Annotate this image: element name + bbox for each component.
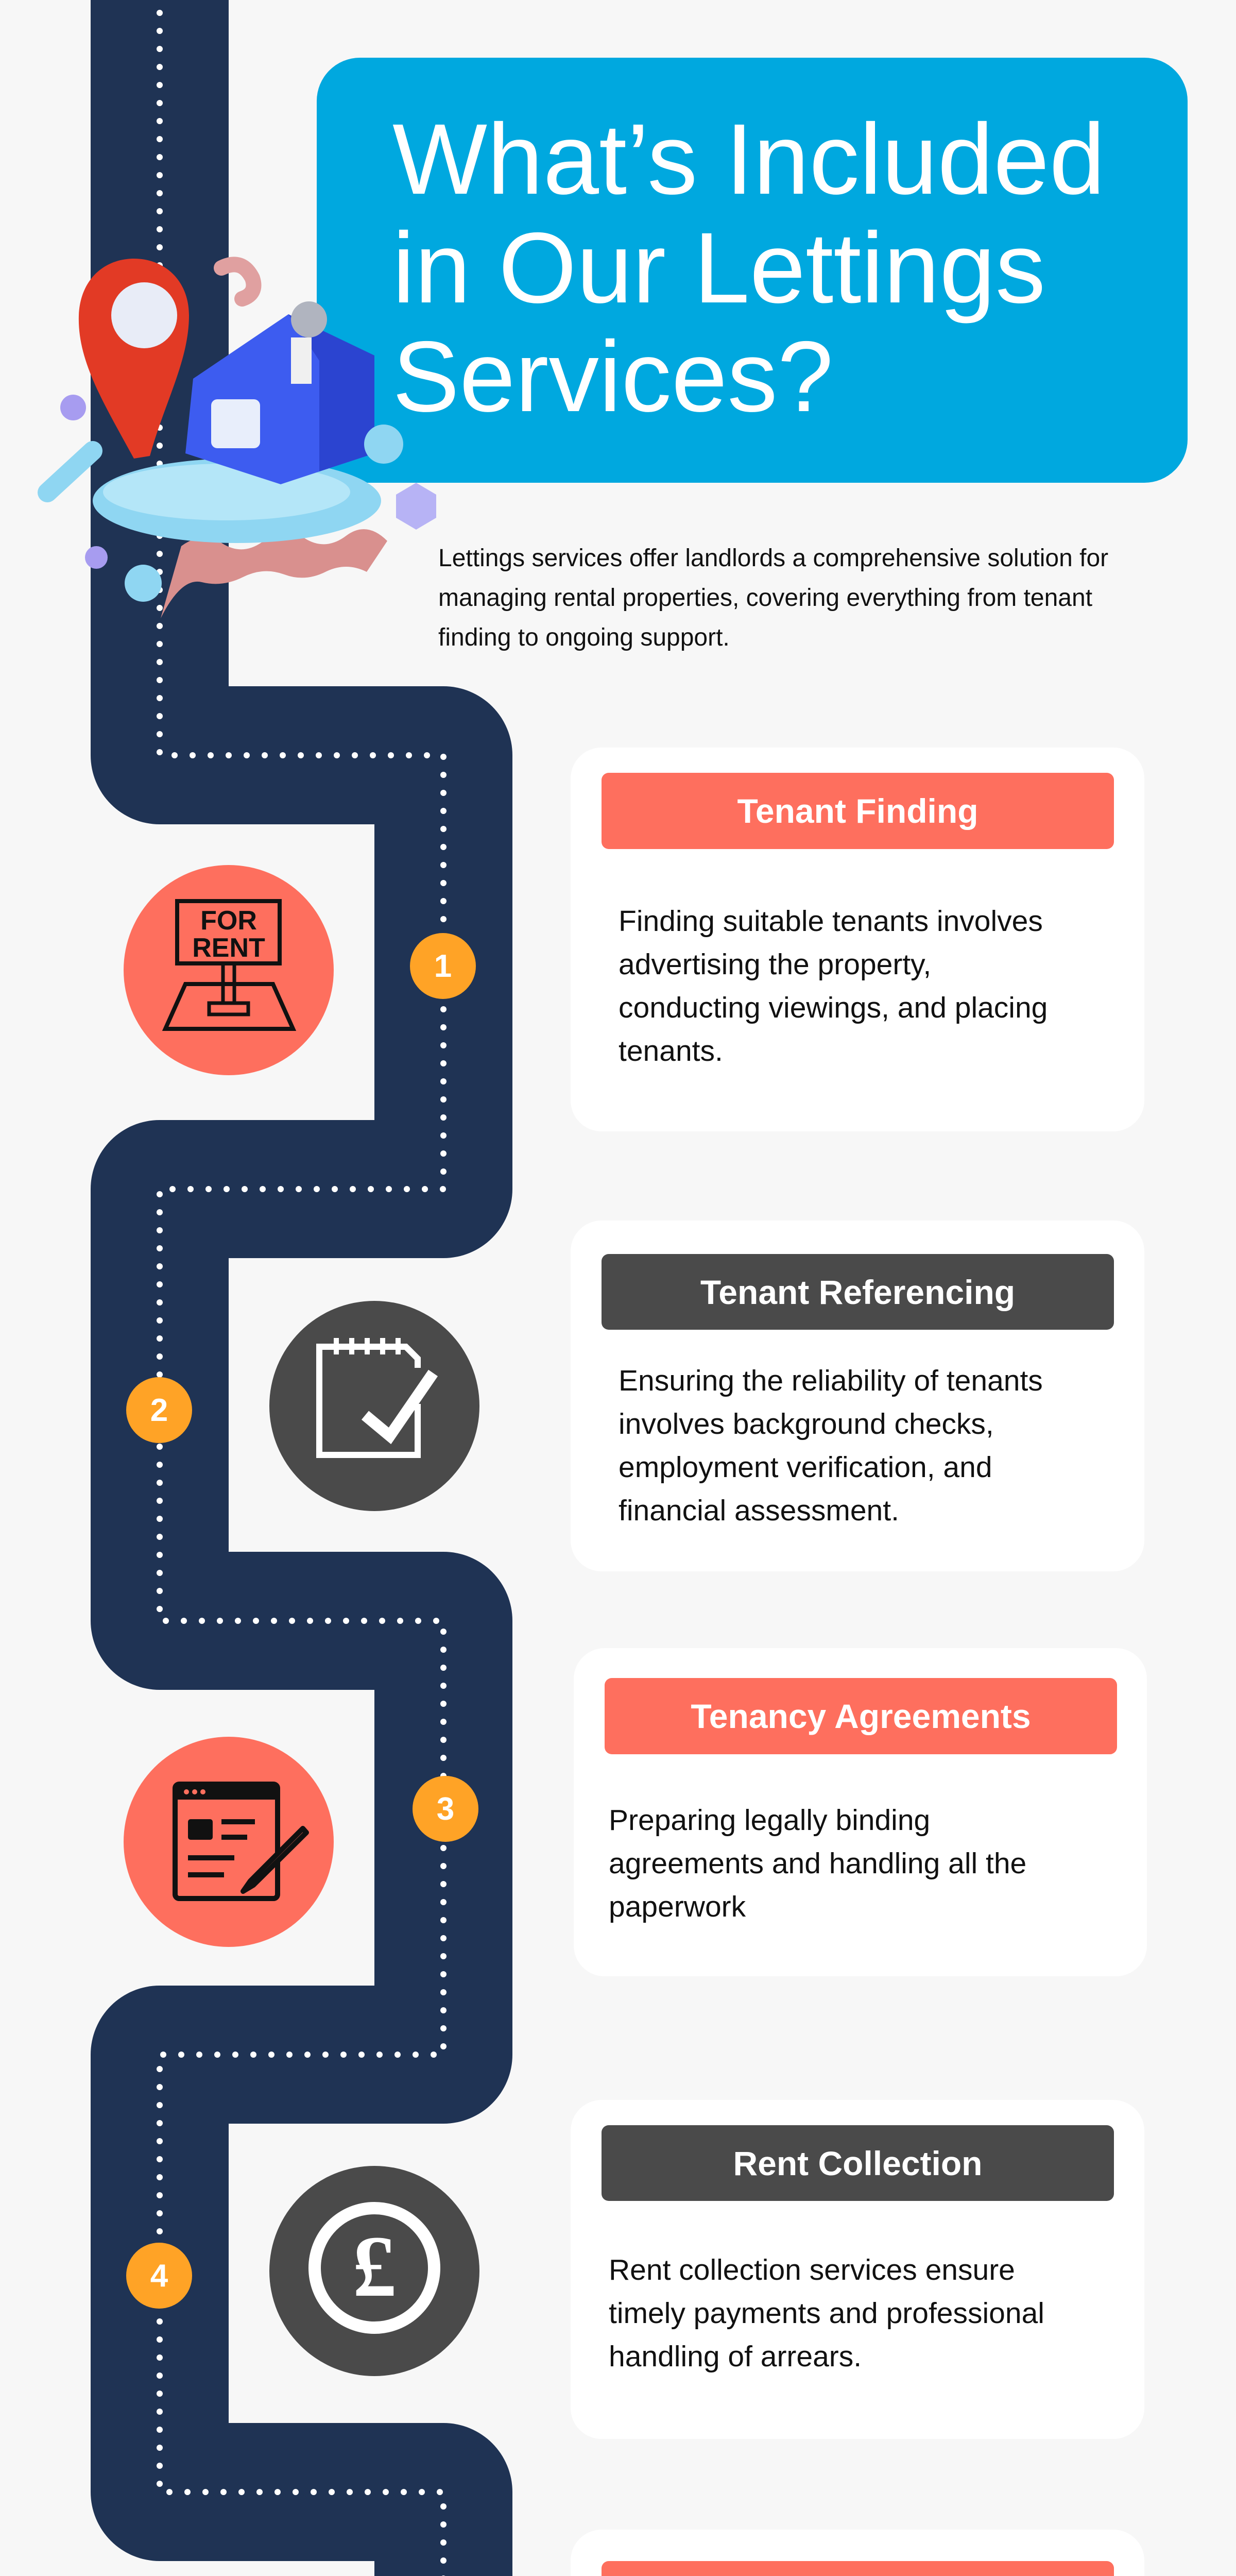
icon: for rent sign	[124, 865, 334, 1075]
intro text: Lettings services offer landlords a comprehensive solution for	[438, 545, 1108, 572]
text: tenant referencing: employment verification, and	[619, 1451, 992, 1484]
header: rent collection: Rent Collection	[733, 2144, 983, 2182]
badge 3	[413, 1776, 478, 1842]
header: tenant referencing: Tenant Referencing	[700, 1273, 1015, 1311]
text: tenant finding	[619, 905, 1048, 1067]
badge 1	[410, 933, 476, 999]
intro text: finding to ongoing support.	[438, 624, 730, 651]
text: tenancy agreements: paperwork	[609, 1890, 746, 1923]
icon: for rent sign: RENT	[192, 933, 265, 963]
header: tenancy agreements: Tenancy Agreements	[691, 1697, 1031, 1735]
text: tenant finding: conducting viewings, and placing	[619, 991, 1048, 1024]
panel: tenant finding	[571, 748, 1144, 1131]
title box	[317, 58, 1188, 483]
panel: tenant referencing	[571, 1221, 1144, 1571]
title: Services?	[392, 320, 833, 433]
text: tenant referencing: involves background checks,	[619, 1408, 994, 1440]
badge 4	[126, 2243, 192, 2309]
text: rent collection: timely payments and professional	[609, 2297, 1044, 2330]
text: tenancy agreements: agreements and handling all the	[609, 1847, 1026, 1880]
text: rent collection	[609, 2253, 1044, 2373]
badge 4: 4	[150, 2258, 168, 2294]
text: tenancy agreements	[609, 1804, 1026, 1923]
text: tenant finding: tenants.	[619, 1035, 723, 1067]
header: tenant finding: Tenant Finding	[737, 792, 978, 830]
text: tenancy agreements: Preparing legally binding	[609, 1804, 930, 1837]
text: rent collection: Rent collection services ensure	[609, 2253, 1015, 2286]
title	[392, 103, 1105, 433]
icon: clipboard check	[269, 1301, 479, 1511]
header: ongoing support	[602, 2561, 1114, 2576]
illustration: house	[38, 257, 436, 618]
badge 2: 2	[150, 1392, 168, 1428]
badge 2	[126, 1377, 192, 1443]
text: tenant finding: advertising the property,	[619, 948, 931, 981]
panel: ongoing support	[571, 2530, 1144, 2576]
text: tenant referencing	[619, 1364, 1043, 1527]
text: rent collection: handling of arrears.	[609, 2340, 862, 2373]
icon: pound coin: £	[352, 2218, 397, 2315]
header: tenant finding	[602, 773, 1114, 849]
title: What’s Included	[392, 103, 1105, 215]
title: in Our Lettings	[392, 212, 1045, 324]
intro text: managing rental properties, covering everything from tenant	[438, 584, 1092, 612]
header: tenant referencing	[602, 1254, 1114, 1330]
header: tenancy agreements	[605, 1678, 1117, 1754]
intro text	[438, 545, 1108, 651]
text: tenant referencing: financial assessment.	[619, 1494, 899, 1527]
icon: document pen	[124, 1737, 334, 1947]
header: rent collection	[602, 2125, 1114, 2201]
icon: pound coin	[269, 2166, 479, 2376]
panel: tenancy agreements	[574, 1648, 1147, 1976]
badge 3: 3	[437, 1791, 454, 1827]
icon: for rent sign: FOR	[200, 906, 257, 936]
badge 1: 1	[434, 948, 452, 984]
panel: rent collection	[571, 2100, 1144, 2439]
text: tenant finding: Finding suitable tenants involves	[619, 905, 1043, 938]
text: tenant referencing: Ensuring the reliability of tenants	[619, 1364, 1043, 1397]
